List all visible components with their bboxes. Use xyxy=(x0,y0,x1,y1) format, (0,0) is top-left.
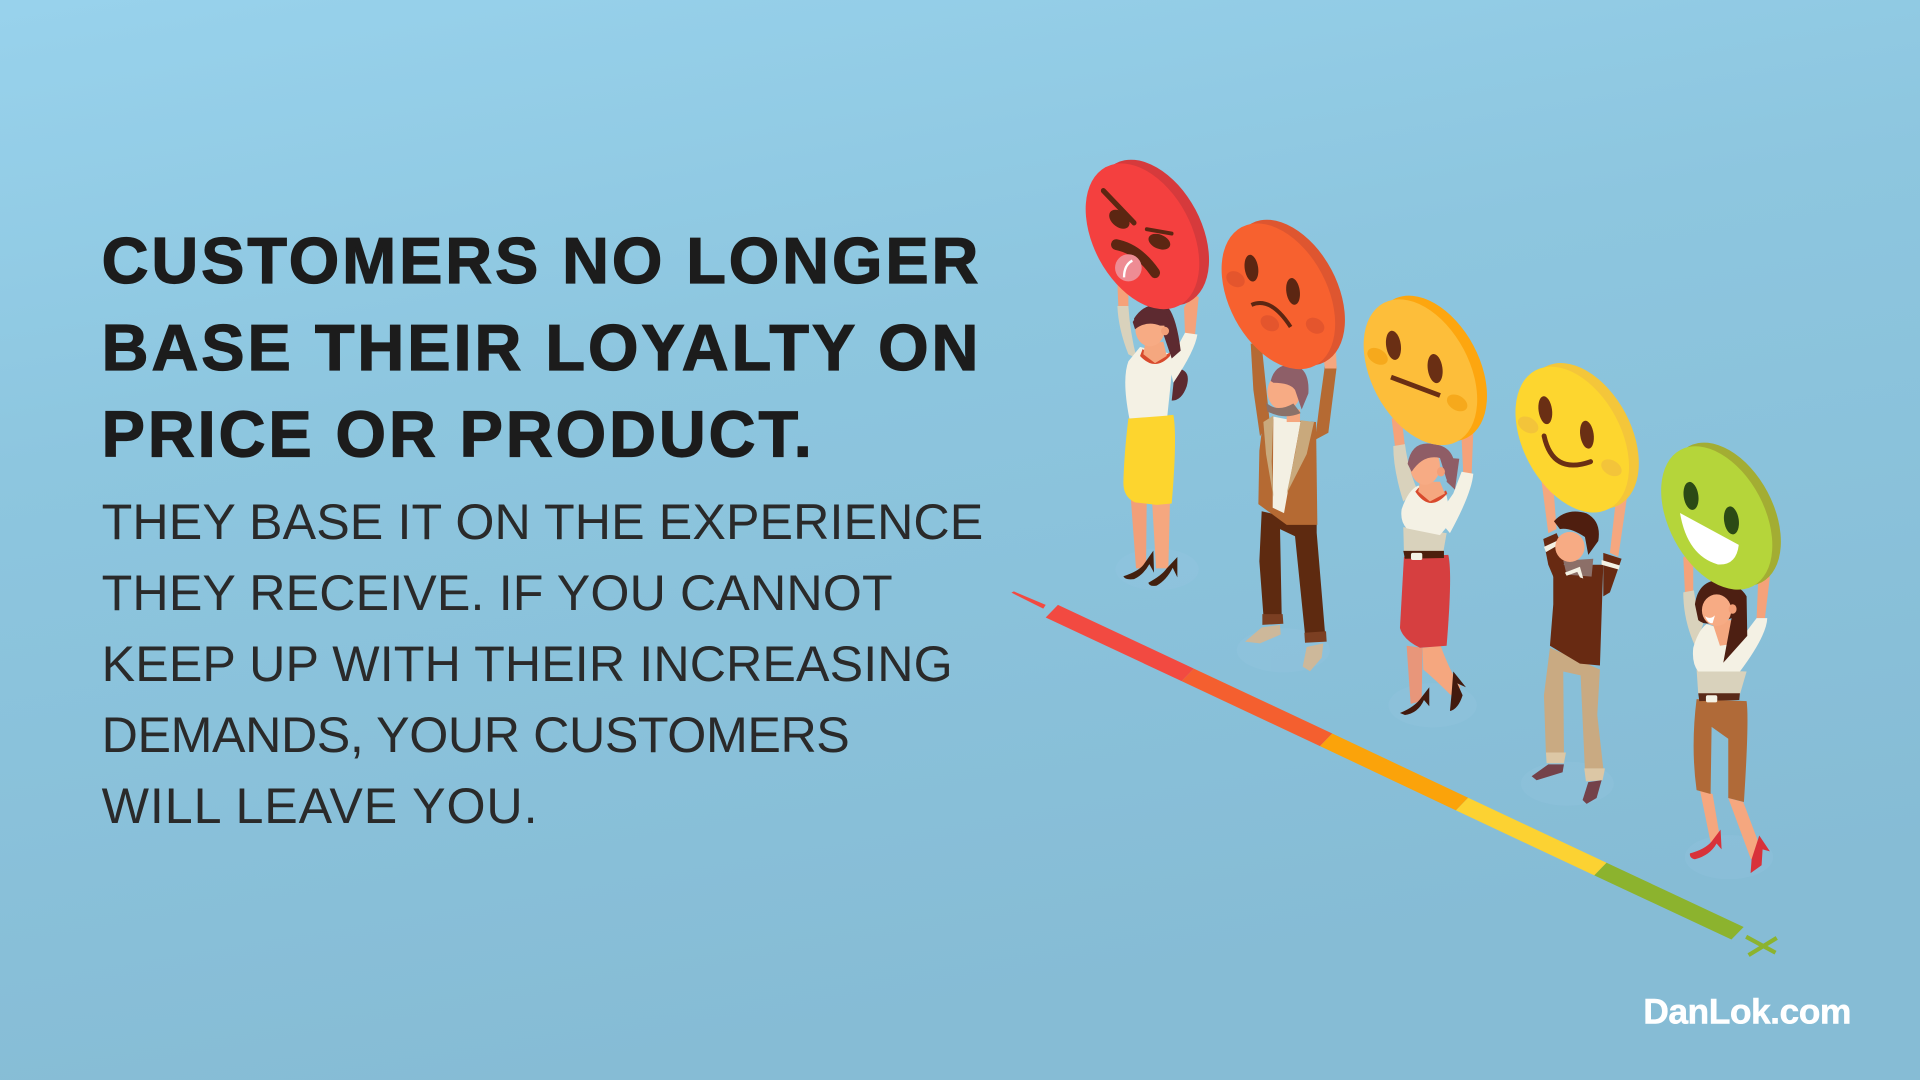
headline xyxy=(102,224,978,471)
satisfaction scale line xyxy=(1011,591,1744,940)
person 3: woman in red skirt xyxy=(1392,418,1473,715)
floor shadows xyxy=(1116,549,1773,879)
body text: THEY BASE IT ON THE EXPERIENCE xyxy=(102,494,983,550)
emoji disc: angry red xyxy=(1062,140,1232,329)
body text: THEY RECEIVE. IF YOU CANNOT xyxy=(102,565,893,621)
body text: DEMANDS, YOUR CUSTOMERS xyxy=(102,707,850,763)
emoji disc: smiling yellow xyxy=(1492,344,1662,532)
body text: WILL LEAVE YOU. xyxy=(102,778,538,834)
headline: BASE THEIR LOYALTY ON xyxy=(102,311,978,384)
logo: DanLok.com xyxy=(1643,992,1851,1032)
headline: PRICE OR PRODUCT. xyxy=(102,398,812,471)
person 2: bearded man in brown jacket xyxy=(1245,343,1337,671)
icon: green x at end of scale xyxy=(1746,937,1777,955)
emoji disc: laughing green xyxy=(1638,424,1804,608)
emoji disc: neutral yellow-orange xyxy=(1340,276,1510,464)
emoji disc: sad orange xyxy=(1198,200,1368,389)
headline: CUSTOMERS NO LONGER xyxy=(102,224,978,297)
body text: KEEP UP WITH THEIR INCREASING xyxy=(102,636,953,692)
person 5: smiling woman in brown trousers xyxy=(1683,557,1770,873)
body text xyxy=(102,494,983,834)
person 1: woman in yellow skirt xyxy=(1117,283,1199,586)
person 4: man in dark brown sweater xyxy=(1532,482,1627,804)
